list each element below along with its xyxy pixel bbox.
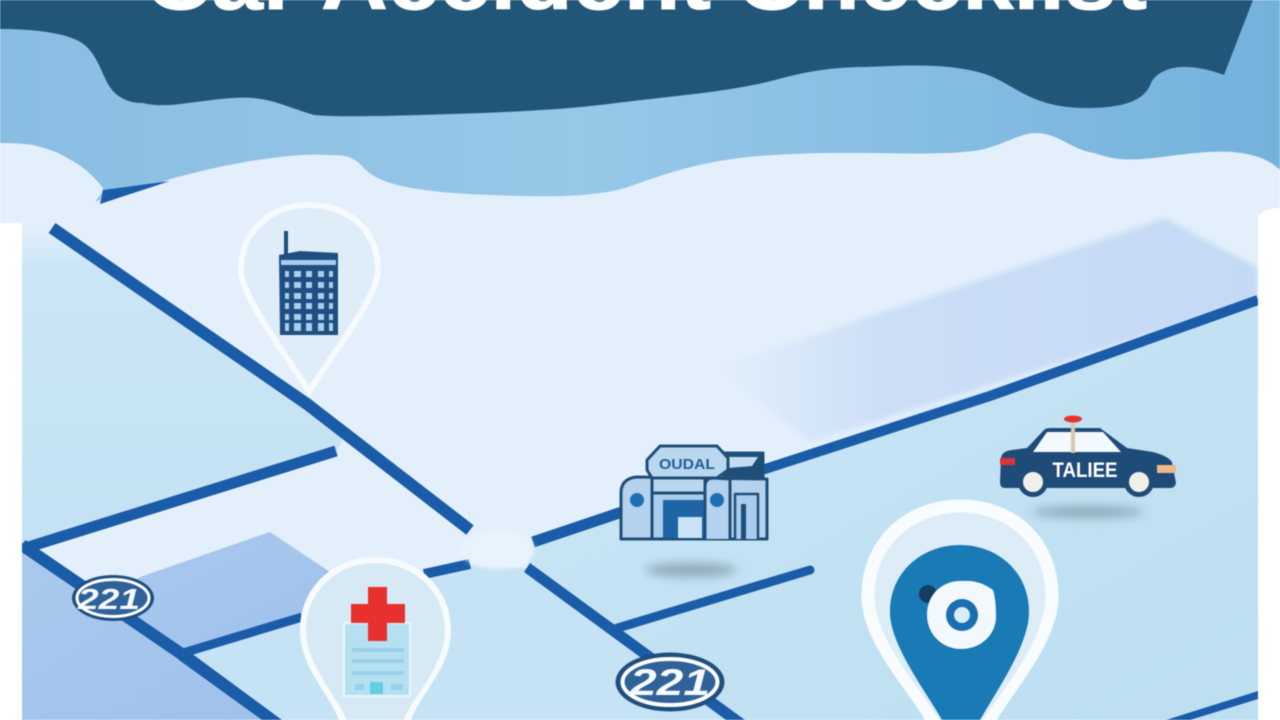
road network xyxy=(22,228,1258,720)
left land parcel xyxy=(22,228,345,549)
upper road fragment xyxy=(100,181,170,204)
left snow lump xyxy=(0,143,103,224)
road badge right xyxy=(616,652,724,712)
icon: red cross xyxy=(351,587,405,641)
title banner xyxy=(0,0,1253,116)
pin: hospital xyxy=(300,557,451,720)
right land parcel xyxy=(527,300,1258,720)
pin: camera location xyxy=(862,500,1058,720)
icon: office building xyxy=(279,231,338,335)
car lettering: TALIEE xyxy=(1052,459,1118,482)
right page margin xyxy=(1258,208,1280,720)
shadow: police car xyxy=(1032,506,1144,518)
road badge left xyxy=(72,575,154,621)
medium blue block centre xyxy=(100,532,330,655)
pin: office building xyxy=(241,205,378,391)
left page margin xyxy=(0,223,22,720)
icon: police car xyxy=(1000,416,1176,494)
lower land parcel xyxy=(183,565,738,720)
blue location drop xyxy=(890,545,1029,720)
sign text: OUDAL xyxy=(659,456,715,473)
lavender patch xyxy=(715,218,1258,442)
icon: police station xyxy=(621,446,767,539)
icon: camera xyxy=(919,581,996,649)
roundabout xyxy=(462,531,534,569)
shadow: police station xyxy=(645,563,737,577)
road badge left: 221 xyxy=(77,584,140,616)
sky band xyxy=(0,0,1280,240)
icon: hospital building xyxy=(344,587,410,696)
road badge right: 221 xyxy=(629,662,710,703)
medium blue block left xyxy=(22,550,272,720)
wheels xyxy=(1020,470,1152,494)
